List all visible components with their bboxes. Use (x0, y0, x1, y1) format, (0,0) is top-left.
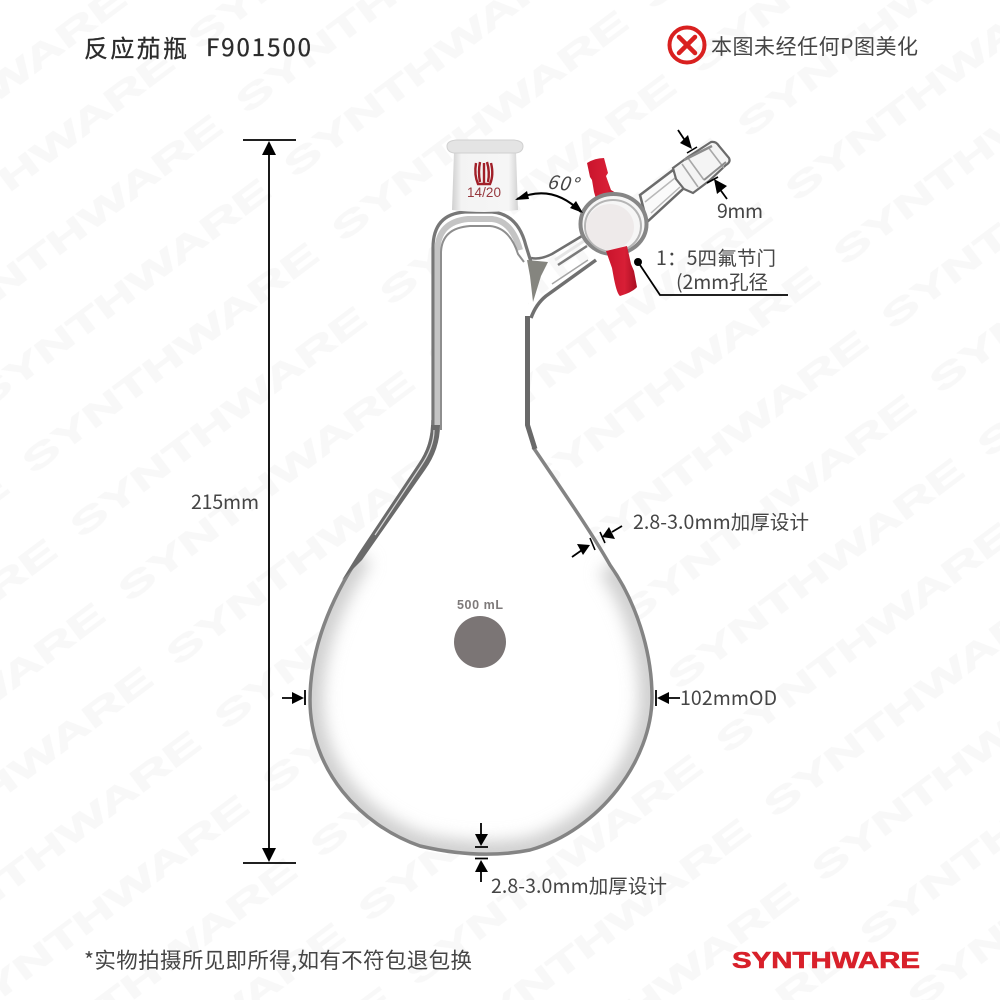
capacity text: 500 mL (457, 598, 503, 612)
product name: 反应茄瓶 (84, 29, 187, 64)
flask body (310, 211, 652, 854)
joint logo (475, 162, 492, 184)
ground joint (447, 140, 523, 212)
dimension: wall thickness bottom (475, 823, 667, 899)
bottom thickness label: 2.8-3.0mm加厚设计 (491, 870, 667, 899)
dimension: 9mm (678, 130, 763, 224)
angle label: 60° (546, 168, 582, 198)
outlet tube (640, 142, 730, 222)
diameter label: 102mmOD (680, 682, 777, 711)
dimension: outer diameter (282, 682, 777, 711)
angle 60 degrees (515, 168, 583, 213)
brand logo: SYNTHWARE (732, 947, 920, 973)
title (84, 28, 311, 64)
capacity mark (454, 598, 506, 668)
side arm junction (527, 236, 596, 318)
product code: F901500 (206, 28, 311, 63)
flask outline (310, 420, 652, 854)
ptfe plug (586, 204, 634, 250)
footnote: *实物拍摄所见即所得,如有不符包退包换 (84, 944, 472, 975)
dimension: height 215mm (191, 140, 296, 863)
glass ring (580, 194, 646, 254)
callout: PTFE stopcock: (2mm孔径 (676, 266, 768, 295)
thickness label: 2.8-3.0mm加厚设计 (633, 506, 809, 535)
flask (310, 140, 730, 854)
callout: PTFE stopcock (634, 242, 788, 295)
notice: not retouched (670, 28, 918, 62)
left shoulder highlight (375, 430, 434, 535)
red handle top (587, 158, 621, 214)
left shoulder thick wall (342, 425, 440, 580)
notice text: 本图未经任何P图美化 (711, 31, 918, 61)
neck walls (433, 212, 535, 449)
joint size: 14/20 (467, 185, 501, 200)
red handle bottom (606, 246, 637, 296)
stopcock (580, 158, 646, 296)
frosted circle (454, 616, 506, 668)
inner glass shading (310, 555, 652, 854)
dimension: wall thickness side (572, 506, 809, 557)
icon: red cross (670, 28, 704, 62)
callout text: 1：5四氟节门 (656, 242, 776, 271)
9mm label: 9mm (717, 195, 763, 224)
height label: 215mm (191, 486, 259, 515)
